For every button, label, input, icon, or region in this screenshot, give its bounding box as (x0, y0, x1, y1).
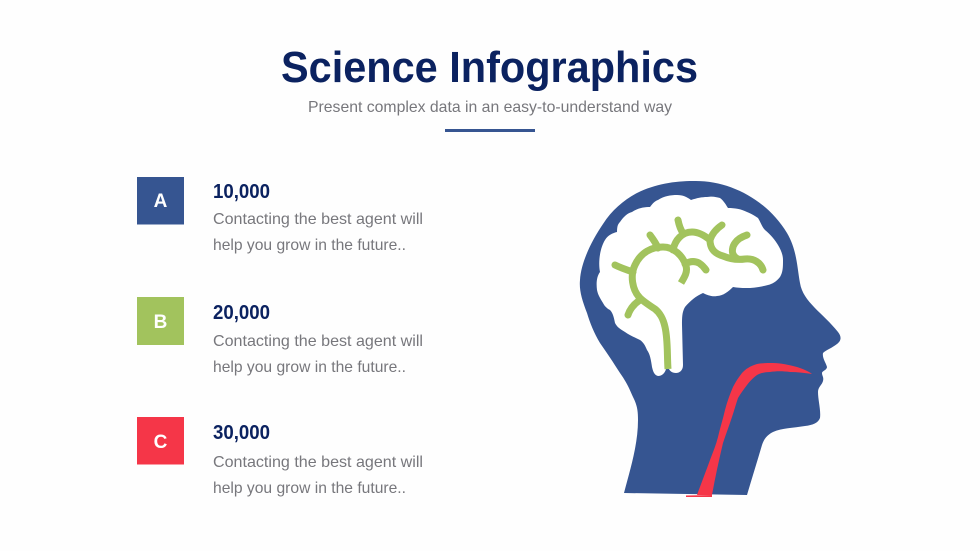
description B: help you grow in the future.. (213, 359, 406, 376)
brain vessels (615, 220, 763, 369)
description C: help you grow in the future.. (213, 480, 406, 497)
description B (213, 333, 423, 376)
badge A (137, 177, 184, 224)
description A (213, 211, 423, 254)
icon: head with brain and throat (580, 181, 841, 497)
title: Science Infographics (281, 43, 698, 92)
title underline (445, 129, 535, 132)
item B (137, 297, 423, 376)
description A: Contacting the best agent will (213, 211, 423, 228)
description C (213, 454, 423, 497)
badge A: A (154, 191, 168, 212)
subtitle: Present complex data in an easy-to-understand way (308, 99, 672, 116)
badge C (137, 417, 184, 464)
item A (137, 177, 423, 254)
description C: Contacting the best agent will (213, 454, 423, 471)
item C (137, 417, 423, 497)
description B: Contacting the best agent will (213, 333, 423, 350)
badge C: C (154, 432, 168, 453)
description A: help you grow in the future.. (213, 237, 406, 254)
value B: 20,000 (213, 302, 270, 324)
throat tube (686, 363, 812, 497)
badge B: B (154, 312, 167, 333)
head silhouette (580, 181, 841, 495)
value A: 10,000 (213, 181, 270, 203)
value C: 30,000 (213, 422, 270, 444)
badge B (137, 297, 184, 345)
brain (597, 195, 783, 376)
